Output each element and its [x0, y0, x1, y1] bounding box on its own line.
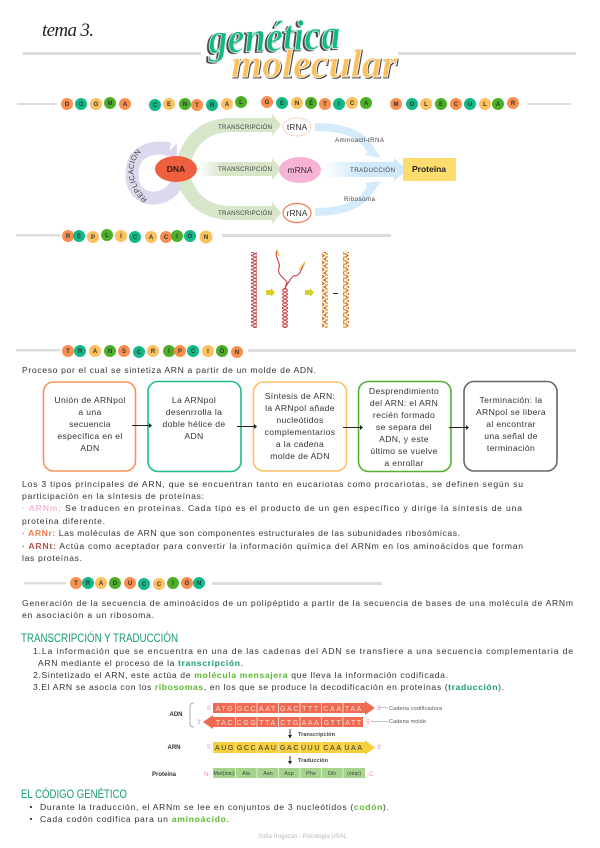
text: translation definition	[22, 598, 573, 620]
arrow: traducción: Traducción	[298, 758, 329, 764]
label: cadena molde	[371, 719, 426, 725]
helix: daughter strand two	[343, 252, 349, 328]
process box 4: del ARN: el ARN	[370, 398, 438, 408]
arrow: transcription to mRNA: TRANSCRIPCIÓN	[218, 166, 272, 173]
title: genética	[207, 11, 341, 63]
label: aminoacil-tRNA: Aminoacil-tRNA	[335, 137, 385, 144]
section banner: transcripción: N	[235, 350, 239, 356]
node: DNA: DNA	[167, 164, 185, 174]
text block: RNA types	[22, 479, 523, 563]
template strand: TTA	[259, 720, 277, 727]
helix: parent strand	[251, 252, 257, 328]
mRNA strand: CAA	[323, 745, 343, 752]
section banner: replicación: P	[91, 235, 95, 241]
helix: opening fork	[276, 250, 305, 328]
section banner: traducción: I	[172, 581, 174, 587]
coding strand: AAT	[259, 706, 277, 713]
node: tRNA	[283, 118, 311, 136]
mRNA strand: GAC	[280, 745, 300, 752]
diagram: DNA replication strands	[251, 250, 349, 328]
section banner: dogma central: O	[79, 102, 84, 108]
arrow: traducción	[288, 756, 329, 764]
process box 2: La ARNpol	[172, 395, 216, 405]
section banner: transcripción: C	[191, 349, 196, 355]
process box 2	[148, 382, 241, 472]
section banner: dogma central: M	[394, 102, 398, 108]
template strand: CTG	[280, 720, 300, 727]
protein chain: Asp	[284, 771, 294, 777]
section banner: dogma central: U	[468, 102, 472, 108]
strand end labels: 3'	[377, 706, 381, 712]
section banner: transcripción: N	[108, 349, 112, 355]
text block: RNA types: participación en la síntesis de proteínas:	[22, 491, 204, 501]
section banner: traducción	[24, 577, 382, 590]
text block: RNA types: proteína diferente.	[22, 516, 105, 526]
coding strand: GAC	[280, 706, 300, 713]
section banner: replicación: C	[133, 235, 138, 241]
section banner: replicación: I	[176, 234, 178, 240]
mRNA strand: GCC	[237, 745, 257, 752]
strand end labels: 5'	[207, 706, 211, 712]
section banner: dogma central: R	[511, 101, 516, 107]
protein chain: Gln	[328, 771, 336, 777]
section banner: dogma central: D	[65, 102, 70, 108]
process box 1: secuencia	[69, 419, 111, 429]
section banner: dogma central: L	[483, 102, 487, 108]
section banner: dogma central: E	[280, 101, 284, 107]
section banner: traducción: T	[74, 581, 78, 587]
numbered list: 1.La información que se encuentra en una de las cadenas del ADN se transfiere a una secuencia complementaria de	[33, 646, 573, 656]
numbered list: ARN mediante el proceso de la transcripción.	[38, 658, 243, 668]
coding strand	[213, 701, 375, 715]
arrow: box 2 to 3	[237, 424, 257, 429]
arrow: step one	[266, 288, 275, 297]
node: mRNA: mRNA	[287, 165, 313, 175]
process box 1: Unión de ARNpol	[54, 395, 126, 405]
arrow: translation	[323, 146, 407, 193]
label: ADN: ADN	[170, 712, 182, 718]
section banner: transcripción: A	[93, 349, 98, 355]
protein chain: Phe	[306, 771, 316, 777]
coding strand: CAA	[323, 706, 343, 713]
process box 3: complementarios	[265, 427, 335, 437]
section banner: dogma central: L	[239, 100, 243, 106]
section banner: dogma central: A	[364, 101, 369, 107]
section banner: dogma central: A	[496, 102, 501, 108]
arrow: translation: TRADUCCIÓN	[350, 167, 395, 174]
arrow: transcription to mRNA	[198, 158, 281, 180]
coding strand: GCC	[237, 706, 257, 713]
section banner: transcripción: R	[151, 349, 156, 355]
strand end labels	[197, 706, 381, 778]
section banner: dogma central	[17, 96, 571, 111]
template strand: TAC	[216, 720, 234, 727]
process box 1: específica en el	[57, 431, 123, 441]
process box 5: una señal de	[484, 431, 538, 441]
plus sign	[333, 293, 338, 294]
section banner: traducción: Ó	[185, 579, 190, 587]
arrow: transcripción: Transcripción	[298, 732, 336, 738]
process box 1: ADN	[80, 443, 100, 453]
section banner: dogma central: L	[424, 102, 428, 108]
coding strand: ATG	[216, 706, 234, 713]
process box 2: doble hélice de	[162, 419, 226, 429]
mRNA strand: UUU	[301, 745, 321, 752]
process box 3: molde de ADN	[270, 451, 330, 461]
helix: daughter strand one	[322, 252, 328, 328]
arrow: rRNA to translation	[315, 185, 372, 212]
section banner: replicación: I	[120, 234, 122, 240]
section banner: replicación: E	[77, 234, 81, 240]
mRNA strand: UAA	[344, 745, 364, 752]
section banner: dogma central: C	[350, 101, 355, 107]
section banner: transcripción: I	[168, 349, 170, 355]
text block: RNA types: las proteínas.	[22, 553, 82, 563]
arrow: transcription to rRNA: TRANSCRIPCIÓN	[218, 210, 272, 217]
strand end labels: 3'	[377, 745, 381, 751]
section banner: dogma central: C	[454, 102, 459, 108]
protein chain: Ala	[242, 771, 251, 777]
process box 4	[358, 382, 451, 472]
process box 3	[254, 382, 346, 471]
protein chain	[213, 768, 365, 778]
mRNA strand	[213, 740, 375, 755]
template strand: GTT	[324, 720, 342, 727]
text block: RNA types: · ARNm: Se traducen en proteínas. Cada tipo es el producto de un gen específico y dirige la síntesis de una	[22, 503, 522, 513]
arrow: transcripción	[288, 729, 336, 738]
process box 5: ARNpol se libera	[476, 407, 546, 417]
template strand	[203, 715, 363, 729]
section banner: dogma central: O	[410, 102, 415, 108]
section banner: dogma central: N	[183, 102, 187, 108]
section banner: transcripción: T	[66, 349, 70, 355]
section banner: transcripción: I	[207, 349, 209, 355]
handwritten label: tema 3: tema 3.	[42, 20, 94, 41]
arrow: box 1 to 2	[132, 423, 152, 428]
diagram: central dogma flow	[126, 114, 456, 224]
protein chain: (stop)	[347, 771, 361, 777]
template strand: ATT	[345, 720, 363, 727]
label: Proteína: Proteína	[152, 772, 177, 778]
process box 5: al encontrar	[486, 419, 536, 429]
label: ARN: ARN	[168, 745, 180, 751]
heading: el código genético: EL CÓDIGO GENÉTICO	[21, 788, 127, 801]
template strand: AAA	[302, 720, 320, 727]
process box 1: a una	[78, 407, 102, 417]
label: cadena codificadora: Cadena codificadora	[389, 706, 443, 712]
coding strand: TTT	[302, 706, 320, 713]
section banner: transcripción: P	[178, 349, 182, 355]
section banner: dogma central: G	[265, 100, 270, 106]
figure: DNA to protein	[152, 701, 443, 778]
label: ribosoma: Ribosoma	[344, 196, 376, 203]
arrow: transcription to rRNA	[184, 180, 281, 224]
section banner: dogma central: I	[338, 102, 340, 108]
section banner: transcripción: C	[137, 350, 142, 356]
section banner: replicación: C	[164, 235, 169, 241]
section banner: dogma central: G	[94, 102, 99, 108]
bullet list: genetic code	[30, 802, 389, 824]
process box 5	[464, 382, 557, 471]
node: rRNA: rRNA	[287, 208, 308, 218]
section banner: dogma central: N	[295, 101, 299, 107]
strand end labels: 5'	[207, 745, 211, 751]
text: translation definition: en asociación a un ribosoma.	[22, 610, 154, 620]
mRNA strand: AAU	[258, 745, 278, 752]
section banner: replicación: R	[66, 234, 71, 240]
template strand: CGG	[237, 720, 257, 727]
section banner: dogma central: E	[167, 102, 171, 108]
node: Proteina: Proteína	[412, 164, 446, 174]
section banner: transcripción: Ó	[220, 347, 225, 355]
node: tRNA: tRNA	[287, 122, 307, 132]
arrow: replication loop: REPLICACIÓN	[128, 149, 148, 202]
bullet list: genetic code: Cada codón codifica para un aminoácido.	[40, 814, 229, 824]
section banner: transcripción: S	[122, 349, 126, 355]
text block: RNA types: Los 3 tipos principales de ARN, que se encuentran tanto en eucariotas como procariotas, se definen según su	[22, 479, 523, 489]
heading: transcripción y traducción: TRANSCRIPCIÓN Y TRADUCCIÓN	[21, 632, 178, 645]
section banner: traducción: A	[99, 581, 104, 587]
section banner: replicación: A	[149, 235, 154, 241]
strand end labels: 3'	[197, 720, 201, 726]
footer credit: Sofía Rogozan - Psicología USAL	[258, 834, 348, 840]
process box 4: se separa del	[376, 422, 432, 432]
section banner: traducción: C	[142, 582, 147, 588]
process box 1	[44, 382, 136, 471]
section banner: replicación: L	[105, 233, 109, 239]
label: cadena molde: Cadena molde	[389, 719, 426, 725]
strand end labels: N-	[204, 772, 210, 778]
section banner: dogma central: A	[225, 102, 230, 108]
bracket	[190, 703, 194, 727]
process box 3: a la cadena	[276, 439, 324, 449]
process box 4: último se vuelve	[370, 446, 438, 456]
process box 3: la ARNpol añade	[265, 403, 335, 413]
section banner: traducción: R	[86, 581, 91, 587]
arrow: replication loop	[126, 142, 180, 205]
arrow: box 3 to 4	[343, 425, 363, 430]
section banner: dogma central: A	[123, 102, 128, 108]
process box 4: Desprendimiento	[369, 386, 439, 396]
section banner: dogma central: É	[309, 99, 313, 107]
text block: RNA types: · ARNt: Actúa como aceptador para convertir la información química del ARNm en los aminoácidos que forman	[22, 541, 523, 551]
process box 3: nucleótidos	[276, 415, 324, 425]
process box 4: ADN, y este	[379, 434, 429, 444]
title	[23, 11, 576, 86]
text: translation definition: Generación de la secuencia de aminoácidos de un polipéptido a partir de la secuencia de bases de una molécula de ARNm	[22, 598, 573, 608]
section banner: traducción: U	[128, 581, 132, 587]
process box 5: terminación	[487, 443, 535, 453]
process box 4: a enrollar	[384, 458, 424, 468]
strand end labels: 5'	[366, 720, 370, 726]
arrow: box 4 to 5	[449, 425, 469, 430]
process box 4: recién formado	[373, 410, 435, 420]
numbered list: 2.Sintetizado el ARN, este actúa de molécula mensajera que lleva la información codificada.	[33, 670, 448, 680]
node: DNA	[155, 156, 197, 182]
arrow: tRNA to translation	[315, 127, 372, 153]
text: transcription definition: Proceso por el cual se sintetiza ARN a partir de un molde de ADN.	[22, 365, 316, 375]
section banner: dogma central: T	[195, 103, 199, 109]
strand end labels: -C	[367, 772, 374, 778]
node: rRNA	[283, 204, 311, 222]
numbered list	[33, 646, 573, 692]
section banner: traducción: D	[113, 581, 118, 587]
coding strand: TAA	[345, 706, 363, 713]
section banner: replicación	[16, 229, 391, 244]
process box 2: ADN	[184, 431, 204, 441]
section banner: dogma central: C	[153, 103, 158, 109]
arrow: step two	[305, 288, 314, 297]
arrow: transcription to tRNA	[184, 114, 281, 160]
section banner: dogma central: E	[439, 102, 443, 108]
section banner: transcripción	[16, 345, 576, 358]
process box 3: Síntesis de ARN:	[265, 391, 335, 401]
arrow: transcription to tRNA: TRANSCRIPCIÓN	[218, 124, 272, 131]
title: molecular	[231, 41, 397, 86]
process box 5: Terminación: la	[479, 395, 543, 405]
section banner: traducción: N	[197, 581, 201, 587]
mRNA strand: AUG	[215, 745, 235, 752]
text block: RNA types: · ARNr: Las moléculas de ARN que son componentes estructurales de las subunidades ribosómicas.	[22, 528, 460, 538]
process box 2: desenrrolla la	[166, 407, 222, 417]
node: mRNA	[279, 157, 321, 183]
protein chain: Met(inic)	[213, 771, 235, 777]
bullet list: genetic code: Durante la traducción, el ARNm se lee en conjuntos de 3 nucleótidos (codón).	[40, 802, 389, 812]
section banner: replicación: N	[204, 235, 208, 241]
section banner: dogma central: M	[108, 101, 112, 107]
protein chain: Asn	[263, 771, 273, 777]
section banner: dogma central: T	[323, 102, 327, 108]
section banner: replicación: Ó	[188, 232, 193, 240]
section banner: transcripción: R	[78, 349, 83, 355]
section banner: traducción: C	[157, 582, 162, 588]
section banner: dogma central: R	[210, 103, 215, 109]
numbered list: 3.El ARN se asocia con los ribosomas, en los que se produce la decodificación en proteínas (traducción).	[33, 682, 504, 692]
node: Proteina	[403, 158, 456, 181]
